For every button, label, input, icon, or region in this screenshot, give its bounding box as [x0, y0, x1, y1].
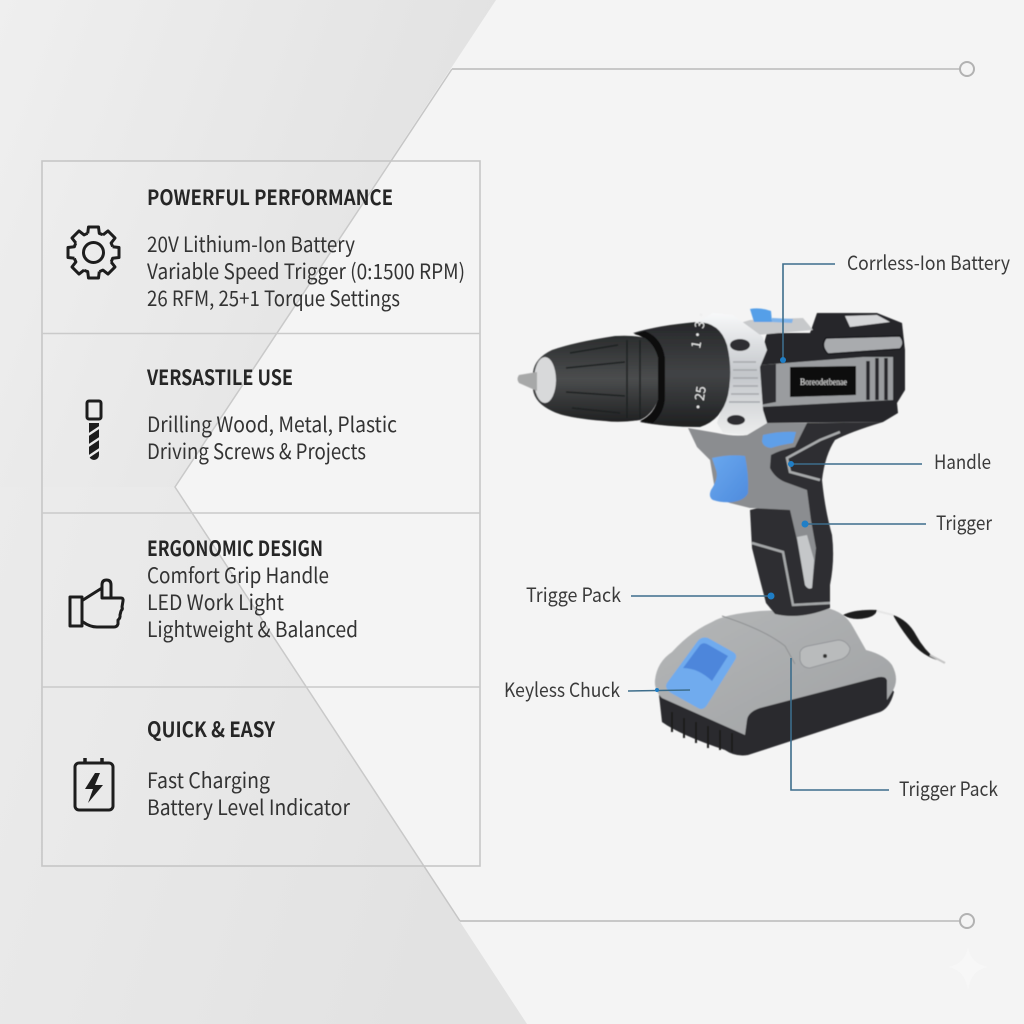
power cable [843, 610, 937, 660]
text: performance details: 26 RFM, 25+1 Torque Settings [147, 283, 400, 313]
text: performance details [147, 229, 465, 313]
bottom decorative connector [460, 914, 974, 928]
chuck collar [534, 357, 556, 403]
icon: thumbs up [70, 580, 123, 627]
text: quick details: Fast Charging [147, 765, 270, 795]
text: performance details: Variable Speed Trigger (0:1500 RPM) [147, 256, 465, 286]
text: quick details: Battery Level Indicator [147, 792, 351, 822]
text: ergonomic details: Comfort Grip Handle [147, 560, 329, 590]
torque collar: ·25 [687, 385, 710, 415]
brand badge: Boreodetbenae [800, 377, 847, 387]
vent slots [868, 358, 886, 400]
handle [688, 422, 883, 616]
text: quick details [147, 765, 351, 822]
blue top switch [750, 308, 793, 323]
callout: cordless-ion battery [780, 247, 1010, 363]
callout: handle: Handle [934, 446, 991, 475]
battery blue recess [666, 638, 736, 709]
heading: quick and easy: QUICK & EASY [147, 714, 276, 744]
blue trigger [710, 455, 748, 502]
text: performance details: 20V Lithium-Ion Battery [147, 229, 355, 259]
section: ergonomic design [70, 533, 358, 644]
icon: gear [68, 227, 119, 278]
keyless chuck [533, 336, 658, 422]
callout: handle [788, 446, 991, 475]
text: ergonomic details [147, 560, 358, 644]
icon: battery with bolt [75, 758, 113, 810]
callout: trigge pack [526, 579, 774, 608]
section: versatile use [87, 362, 397, 466]
heading: versatile use: VERSASTILE USE [146, 362, 293, 392]
motor housing [727, 313, 905, 423]
section: quick and easy [75, 714, 351, 822]
top decorative connector [452, 62, 974, 76]
sparkle mark [948, 947, 988, 990]
battery pack [655, 608, 945, 755]
LED light strip [823, 336, 903, 354]
text: ergonomic details: LED Work Light [147, 587, 284, 617]
blue side button [762, 432, 796, 448]
callout: trigger pack: Trigger Pack [899, 773, 998, 802]
icon: drill bit [87, 401, 101, 460]
callout: trigger [802, 507, 992, 536]
text: ergonomic details: Lightweight & Balanced [147, 614, 358, 644]
battery clip [800, 640, 850, 668]
silver gear housing [697, 313, 767, 435]
callout: trigge pack: Trigge Pack [526, 579, 621, 608]
brand badge [790, 366, 856, 397]
heading: ergonomic design: ERGONOMIC DESIGN [147, 533, 323, 563]
callout: trigger: Trigger [936, 507, 992, 536]
section: powerful performance [68, 182, 465, 313]
callout: cordless-ion battery: Corrless-Ion Battery [847, 247, 1010, 276]
torque collar [633, 307, 730, 427]
torque collar: 1·3· [685, 307, 711, 350]
text: versatile details [147, 409, 397, 466]
features panel [42, 161, 480, 866]
heading: powerful performance: POWERFUL PERFORMANCE [147, 182, 393, 212]
callout: keyless chuck: Keyless Chuck [504, 674, 620, 703]
callout: trigger pack [791, 658, 998, 802]
drill bit tip [518, 372, 537, 391]
text: versatile details: Drilling Wood, Metal, Plastic [147, 409, 397, 439]
cordless drill illustration [518, 307, 945, 755]
text: versatile details: Driving Screws & Projects [147, 436, 366, 466]
callout: keyless chuck [504, 674, 690, 703]
